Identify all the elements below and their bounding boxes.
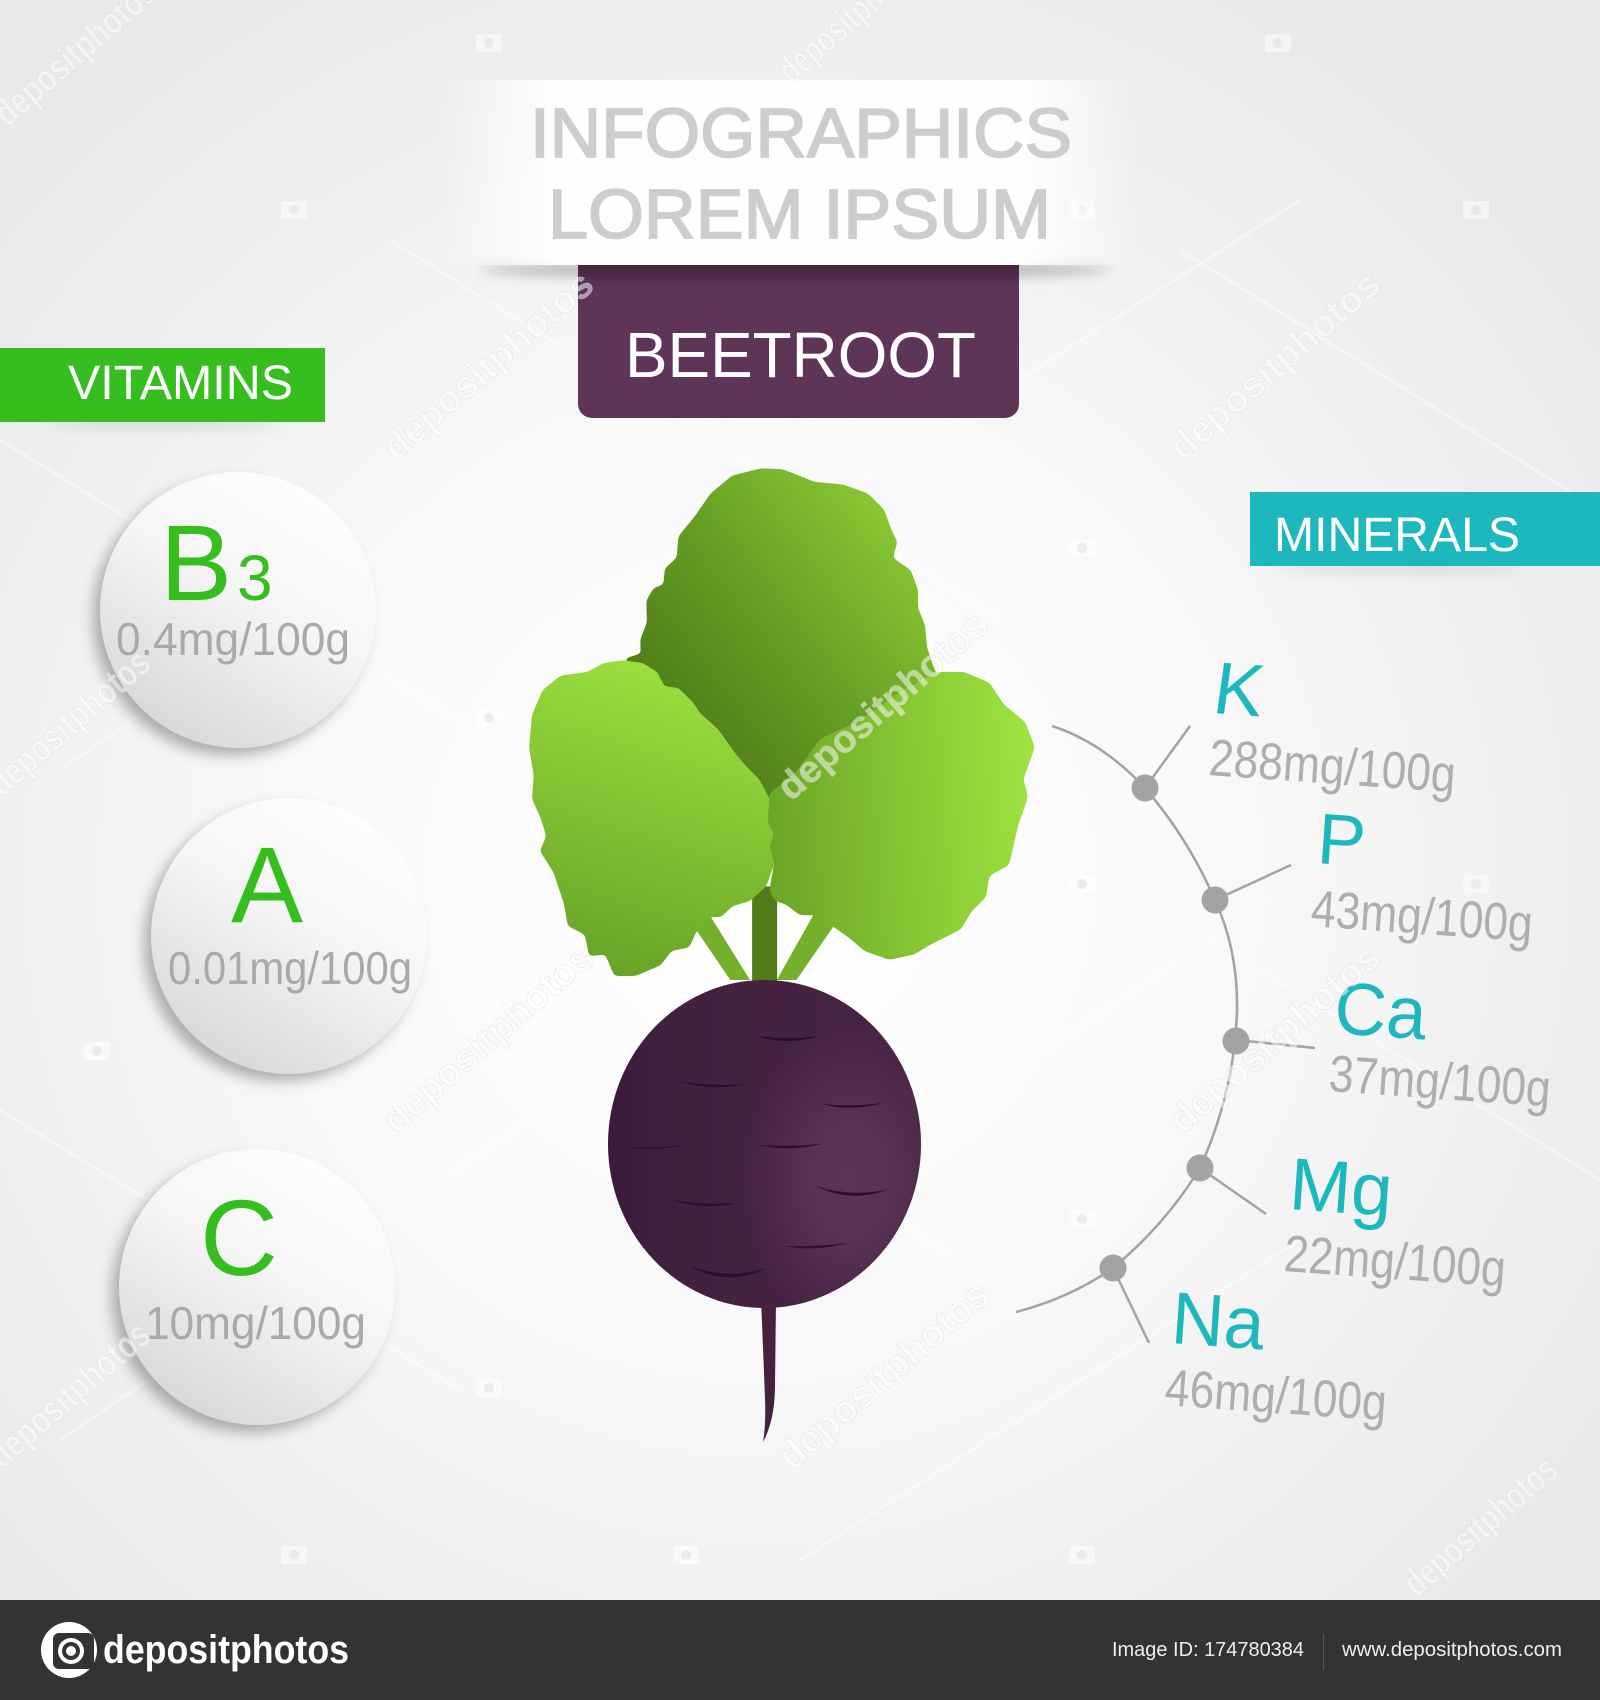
vitamins label: VITAMINS	[68, 357, 293, 410]
title	[530, 94, 1072, 253]
watermarks: depositphotos	[769, 603, 997, 809]
minerals arc	[1016, 726, 1315, 1343]
vitamin circle: B3: B	[160, 502, 232, 623]
stems	[696, 886, 834, 981]
vitamins label	[0, 348, 325, 427]
vitamin circle: B3: 3	[237, 542, 273, 614]
vitamin circle: A: 0.01mg/100g	[168, 942, 412, 994]
mineral: K: 288mg/100g	[1207, 729, 1458, 804]
footer bar	[0, 1600, 1600, 1700]
mineral: Na: 46mg/100g	[1163, 1359, 1389, 1432]
vitamin circle: B3: 0.4mg/100g	[116, 613, 350, 665]
vitamin circle: A: A	[231, 824, 303, 945]
watermark grid	[0, 200, 1600, 1560]
watermark cameras	[84, 34, 1489, 1564]
mineral: Ca	[1327, 966, 1553, 1118]
mineral: Na: Na	[1169, 1276, 1268, 1366]
title: LOREM IPSUM	[548, 175, 1051, 253]
title: INFOGRAPHICS	[530, 94, 1072, 172]
taproot	[761, 1300, 776, 1442]
watermarks: depositphotos	[374, 936, 602, 1142]
mineral: Ca: 37mg/100g	[1327, 1045, 1553, 1118]
watermarks: depositphotos	[1161, 936, 1389, 1142]
vitamin circle: A	[144, 798, 427, 1081]
mineral: Ca: Ca	[1332, 966, 1430, 1055]
beetroot illustration	[529, 469, 1035, 1442]
back leaf	[625, 469, 946, 815]
watermarks: depositphotos	[770, 1273, 998, 1479]
watermarks: depositphotos	[1161, 263, 1389, 469]
vitamin circle: C	[112, 1149, 395, 1432]
footer logotype: depositphotos	[103, 1628, 349, 1672]
mineral: K: K	[1209, 647, 1270, 732]
mineral: Mg: Mg	[1287, 1142, 1395, 1232]
mineral: Na	[1163, 1276, 1389, 1432]
watermarks: depositphotos	[374, 263, 602, 469]
footer image id: Image ID: 174780384	[1112, 1639, 1304, 1661]
icon: camera logo	[41, 1622, 97, 1678]
left leaf	[529, 660, 774, 976]
mineral: P: P	[1315, 799, 1368, 882]
mineral: K	[1207, 647, 1458, 804]
vitamin circle: C: C	[200, 1177, 278, 1298]
title ribbon	[440, 80, 1140, 278]
right leaf	[768, 672, 1035, 960]
beet bulb	[608, 980, 921, 1308]
vitamin circle: B3	[93, 472, 376, 755]
minerals label	[1250, 492, 1600, 571]
beetroot label: BEETROOT	[625, 319, 976, 391]
beet skin lines	[623, 1036, 889, 1278]
mineral: P	[1309, 799, 1535, 953]
mineral: Mg	[1282, 1142, 1508, 1298]
footer url: www.depositphotos.com	[1341, 1639, 1562, 1661]
mineral: Mg: 22mg/100g	[1282, 1225, 1508, 1298]
minerals label: MINERALS	[1274, 509, 1520, 562]
vitamin circle: C: 10mg/100g	[145, 1297, 366, 1349]
beetroot label	[578, 265, 1019, 418]
mineral: P: 43mg/100g	[1309, 880, 1535, 953]
